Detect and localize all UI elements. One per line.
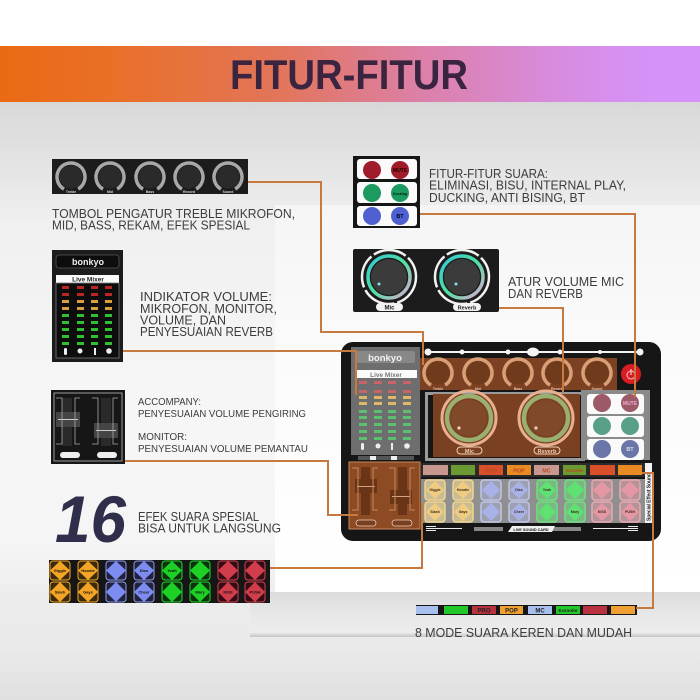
device body bbox=[341, 342, 661, 541]
panel: feature buttons thumbnail: MUTE bbox=[393, 168, 408, 174]
connector: modes bbox=[636, 473, 653, 608]
connector: faders bbox=[125, 461, 358, 515]
panel: sound pads: Yeah bbox=[543, 488, 551, 492]
panel: mic and reverb thumbnail bbox=[353, 249, 499, 312]
panel: feature buttons thumbnail: Ducking bbox=[393, 192, 407, 196]
panel: feature buttons: BT bbox=[626, 447, 634, 453]
panel: mic and reverb knobs bbox=[425, 391, 585, 461]
text: volume indicator: INDIKATOR VOLUME: bbox=[140, 289, 272, 304]
title: FITUR-FITUR bbox=[230, 51, 468, 98]
text: knob description: TOMBOL PENGATUR TREBLE MIKROFON, bbox=[52, 206, 295, 221]
panel: knob thumbnail: Treble bbox=[66, 190, 76, 194]
panel: mode strip thumbnail: POP bbox=[505, 608, 518, 614]
knob strip: Treble bbox=[433, 387, 443, 391]
text: special effects bbox=[138, 509, 281, 536]
connector: mic and reverb bbox=[499, 308, 563, 393]
text: mic reverb volume bbox=[508, 274, 624, 301]
knob strip: Sound bbox=[592, 387, 602, 391]
panel: level meter: bonkyo bbox=[368, 353, 402, 364]
panel: mic and reverb knobs: Reverb bbox=[538, 449, 557, 455]
text: volume indicator: MIKROFON, MONITOR, bbox=[140, 301, 277, 316]
panel: sound pads thumbnail: Gays bbox=[83, 590, 94, 594]
panel: feature buttons thumbnail bbox=[353, 156, 420, 228]
panel: sound pads thumbnail: Hoodie bbox=[81, 568, 96, 573]
connector: knobs bbox=[248, 182, 423, 365]
panel: knob thumbnail: Sound bbox=[223, 190, 233, 194]
panel: sound pads bbox=[421, 479, 645, 523]
panel: feature buttons thumbnail: BT bbox=[396, 214, 404, 220]
connector: level meter bbox=[123, 351, 356, 395]
panel: main device bbox=[341, 342, 661, 541]
panel: mode strip thumbnail: Karaoke bbox=[559, 608, 578, 614]
panel: level meter thumbnail: Live Mixer bbox=[72, 276, 104, 284]
panel: sound pads thumbnail: Mary bbox=[195, 590, 205, 594]
panel: mic and reverb thumbnail: Mic bbox=[384, 306, 395, 312]
text: mic reverb volume: ATUR VOLUME MIC bbox=[508, 274, 624, 289]
panel: mic and reverb knobs: Mic bbox=[465, 449, 474, 455]
panel: sound pads thumbnail: Diss bbox=[140, 568, 149, 573]
knob strip: Mid bbox=[475, 387, 481, 391]
connector: sound pads bbox=[270, 502, 422, 568]
text: accompany and monitor: MONITOR: bbox=[138, 431, 187, 443]
panel: sound pads thumbnail: KISS bbox=[223, 590, 233, 594]
panel: sound pads: PUSH bbox=[625, 510, 635, 514]
panel: knob thumbnail: Bass bbox=[146, 190, 154, 194]
panel: feature buttons: MUTE bbox=[623, 401, 638, 407]
panel: sound pads thumbnail: Slash bbox=[55, 590, 66, 594]
text: sound features: ELIMINASI, BISU, INTERNAL PLAY, bbox=[429, 178, 626, 192]
text: sound features bbox=[429, 166, 626, 205]
panel: knob thumbnail: Mid bbox=[107, 190, 113, 194]
panel: sound pads: KISS bbox=[598, 510, 607, 514]
panel: sound pads: Cheer bbox=[514, 510, 525, 514]
panel: sound pads: Slash bbox=[430, 510, 440, 514]
panel: mode strip thumbnail: PRO bbox=[477, 608, 491, 614]
panel: mode strip thumbnail bbox=[416, 605, 637, 615]
text: volume indicator: PENYESUAIAN REVERB bbox=[140, 324, 273, 339]
panel: knob thumbnail bbox=[52, 158, 248, 196]
text: special effects: BISA UNTUK LANGSUNG bbox=[138, 520, 281, 536]
panel: mode buttons: POP bbox=[513, 468, 525, 474]
panel: mode buttons: Karaoke bbox=[566, 468, 584, 473]
panel: fader thumbnail bbox=[51, 390, 125, 464]
panel: level meter thumbnail: bonkyo bbox=[72, 257, 104, 267]
panel: sound pads: Diss bbox=[515, 488, 523, 492]
panel: sound pads: Hoodie bbox=[457, 488, 469, 492]
panel: mode buttons bbox=[421, 463, 645, 477]
panel: mode strip thumbnail: MC bbox=[535, 608, 545, 614]
panel: level meter bbox=[351, 347, 420, 460]
panel: sound pads: Gays bbox=[459, 510, 467, 514]
text: mic reverb volume: DAN REVERB bbox=[508, 286, 583, 301]
text: knob description: MID, BASS, REKAM, EFEK SPESIAL bbox=[52, 218, 250, 232]
panel: sound pads: Giggle bbox=[429, 488, 441, 492]
panel: mode buttons: PRO bbox=[485, 468, 498, 474]
panel: faders bbox=[349, 462, 420, 529]
panel: mode buttons: MC bbox=[542, 468, 551, 474]
panel: sound pads thumbnail bbox=[49, 560, 270, 603]
bottom deco strip bbox=[426, 526, 638, 532]
bottom deco strip: LIVE SOUND CARD bbox=[513, 528, 549, 532]
connector: feature buttons bbox=[420, 214, 635, 397]
text: knob description bbox=[52, 206, 295, 232]
panel: sound pads thumbnail: Cheer bbox=[138, 590, 150, 594]
text: special effects: EFEK SUARA SPESIAL bbox=[138, 509, 259, 524]
waveform strip bbox=[424, 348, 644, 356]
knob strip: Bass bbox=[514, 387, 522, 391]
text: volume indicator: VOLUME, DAN bbox=[140, 312, 226, 328]
header banner bbox=[0, 46, 700, 102]
power button bbox=[621, 364, 641, 384]
knob strip: Record bbox=[551, 387, 563, 391]
text: sound features: FITUR-FITUR SUARA: bbox=[429, 166, 548, 181]
side label bbox=[645, 463, 652, 523]
text: accompany and monitor: ACCOMPANY: bbox=[138, 396, 201, 408]
text: accompany and monitor bbox=[138, 396, 308, 455]
panel: knob thumbnail: Record bbox=[183, 190, 195, 194]
big number 16: 16 bbox=[55, 482, 127, 556]
panel: sound pads: Mary bbox=[571, 510, 579, 514]
side label: Special Effect Sound bbox=[646, 473, 652, 521]
knob strip bbox=[419, 354, 617, 392]
panel: mic and reverb thumbnail: Reverb bbox=[458, 306, 477, 312]
panel: level meter: Live Mixer bbox=[370, 372, 402, 379]
panel: sound pads thumbnail: Giggle bbox=[54, 568, 67, 573]
text: eight modes: 8 MODE SUARA KEREN DAN MUDAH bbox=[415, 625, 632, 640]
panel: sound pads thumbnail: PUSH bbox=[249, 590, 261, 594]
text: accompany and monitor: PENYESUAIAN VOLUME PENGIRING bbox=[138, 408, 306, 420]
panel: sound pads thumbnail: Yeah bbox=[167, 568, 177, 573]
panel: level meter thumbnail bbox=[52, 250, 123, 362]
text: volume indicator bbox=[140, 289, 277, 339]
text: accompany and monitor: PENYESUAIAN VOLUME PEMANTAU bbox=[138, 443, 308, 455]
panel: feature buttons bbox=[581, 390, 650, 460]
text: sound features: DUCKING, ANTI BISING, BT bbox=[429, 190, 585, 205]
